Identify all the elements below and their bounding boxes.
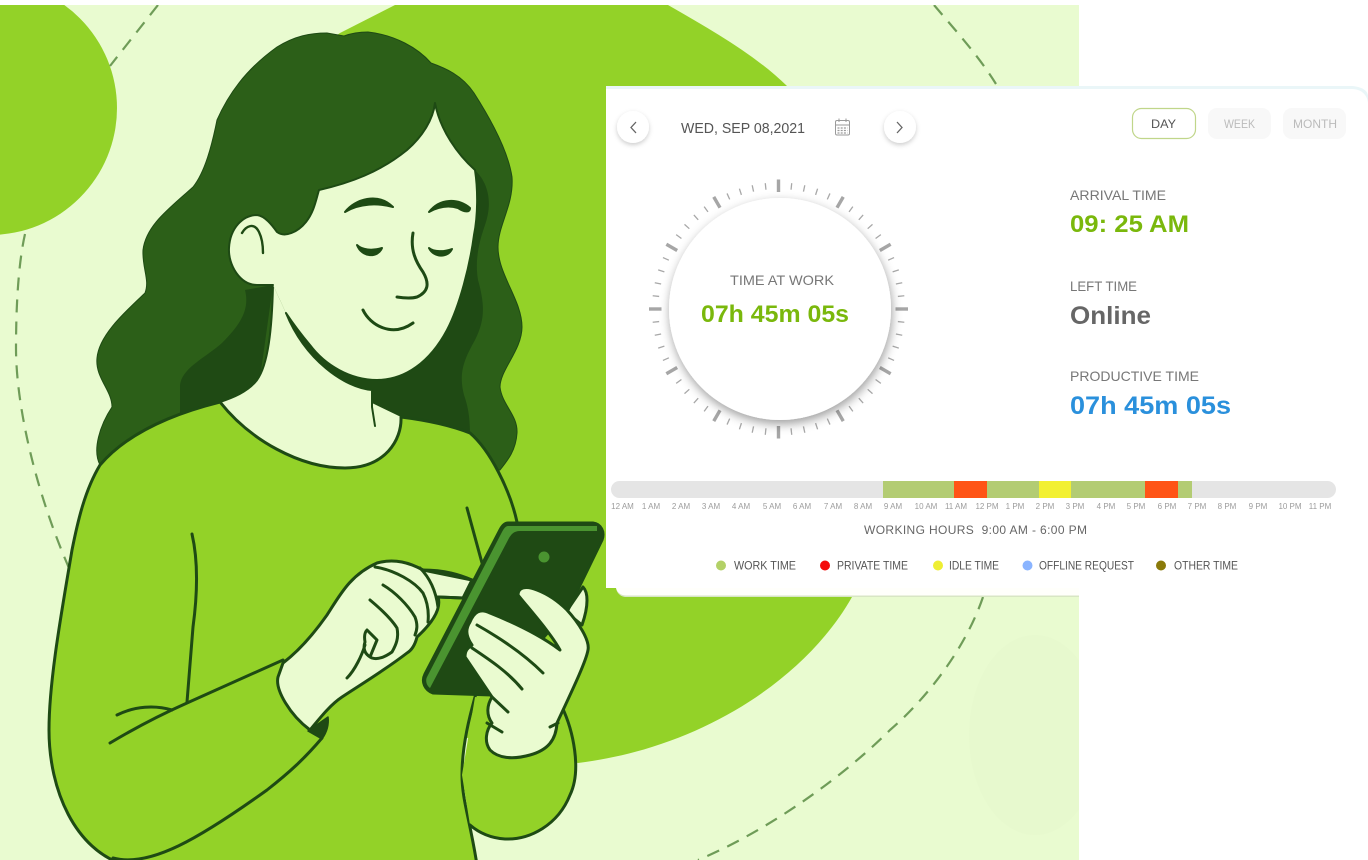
timeline hour labels: 8 PM bbox=[1218, 502, 1237, 511]
tab: week: WEEK bbox=[1224, 117, 1255, 131]
cuff bbox=[308, 717, 328, 739]
timeline hour labels: 4 PM bbox=[1097, 502, 1116, 511]
timeline hour labels: 12 PM bbox=[975, 502, 999, 511]
dial face bbox=[669, 198, 891, 420]
timeline bar bbox=[611, 481, 1336, 498]
date label: WED, SEP 08,2021 bbox=[681, 121, 805, 137]
timeline hour labels: 6 AM bbox=[793, 502, 811, 511]
tab: day bbox=[1132, 108, 1196, 138]
legend: idle time: IDLE TIME bbox=[949, 558, 999, 572]
icon: calendar bbox=[836, 118, 850, 135]
timeline hour labels: 1 AM bbox=[642, 502, 660, 511]
illustration: woman using a phone bbox=[49, 32, 603, 860]
sweater fold lines bbox=[110, 508, 482, 860]
timeline hour labels: 9 PM bbox=[1249, 502, 1268, 511]
face bbox=[229, 103, 477, 380]
hair bbox=[97, 32, 522, 470]
legend: other time: OTHER TIME bbox=[1174, 558, 1238, 572]
legend: offline request: OFFLINE REQUEST bbox=[1039, 558, 1135, 572]
stat: arrival time: ARRIVAL TIME bbox=[1070, 187, 1166, 203]
tab: week bbox=[1208, 108, 1271, 139]
legend bbox=[716, 558, 1238, 572]
facial features bbox=[242, 199, 470, 330]
tab: month: MONTH bbox=[1293, 117, 1337, 131]
timeline hour labels: 11 AM bbox=[945, 502, 967, 511]
neck bbox=[220, 285, 401, 468]
stat: left time bbox=[1070, 278, 1151, 330]
left hand bbox=[278, 561, 472, 730]
button: next day bbox=[884, 111, 916, 143]
timeline hour labels: 2 PM bbox=[1036, 502, 1055, 511]
legend: work time: WORK TIME bbox=[734, 558, 796, 572]
working hours label: WORKING HOURS 9:00 AM - 6:00 PM bbox=[864, 523, 1087, 537]
legend: private time: PRIVATE TIME bbox=[837, 558, 908, 572]
tab: day: DAY bbox=[1151, 117, 1176, 131]
stat: productive time: PRODUCTIVE TIME bbox=[1070, 368, 1199, 384]
dial ticks bbox=[649, 180, 908, 438]
hair shadow bbox=[180, 170, 489, 440]
sweater bbox=[49, 402, 517, 860]
timeline hour labels: 3 PM bbox=[1066, 502, 1085, 511]
clock dial bbox=[649, 180, 908, 438]
dashboard card bbox=[606, 86, 1368, 597]
timeline hour labels: 11 PM bbox=[1309, 502, 1332, 511]
timeline hour labels: 8 AM bbox=[854, 502, 872, 511]
timeline hour labels: 12 AM bbox=[611, 502, 634, 511]
stat: productive time: 07h 45m 05s bbox=[1070, 392, 1231, 420]
timeline hour labels: 2 AM bbox=[672, 502, 690, 511]
date navigation bbox=[617, 111, 916, 143]
button: previous day bbox=[617, 111, 649, 143]
stat: productive time bbox=[1070, 368, 1231, 420]
timeline hour labels: 6 PM bbox=[1158, 502, 1177, 511]
stat: arrival time bbox=[1070, 187, 1189, 238]
stat: arrival time: 09: 25 AM bbox=[1070, 211, 1189, 238]
right sleeve bbox=[462, 697, 576, 839]
time statistics bbox=[1070, 187, 1231, 420]
timeline hour labels: 3 AM bbox=[702, 502, 720, 511]
timeline hour labels bbox=[611, 502, 1332, 511]
tab: month bbox=[1283, 108, 1346, 139]
timeline hour labels: 5 AM bbox=[763, 502, 781, 511]
dial label: TIME AT WORK bbox=[730, 272, 835, 288]
timeline hour labels: 9 AM bbox=[884, 502, 902, 511]
timeline hour labels: 7 AM bbox=[824, 502, 842, 511]
legend: idle time bbox=[933, 558, 999, 572]
timeline hour labels: 7 PM bbox=[1188, 502, 1207, 511]
range tabs bbox=[1132, 108, 1346, 139]
stat: left time: LEFT TIME bbox=[1070, 278, 1137, 294]
timeline hour labels: 10 PM bbox=[1278, 502, 1302, 511]
dial value: 07h 45m 05s bbox=[701, 301, 849, 328]
timeline hour labels: 1 PM bbox=[1006, 502, 1025, 511]
timeline hour labels: 5 PM bbox=[1127, 502, 1146, 511]
legend: other time bbox=[1156, 558, 1238, 572]
timeline hour labels: 10 AM bbox=[915, 502, 938, 511]
timeline hour labels: 4 AM bbox=[732, 502, 750, 511]
back finger bbox=[566, 587, 587, 625]
stat: left time: Online bbox=[1070, 302, 1151, 330]
right hand bbox=[465, 588, 588, 758]
phone bbox=[423, 523, 603, 695]
